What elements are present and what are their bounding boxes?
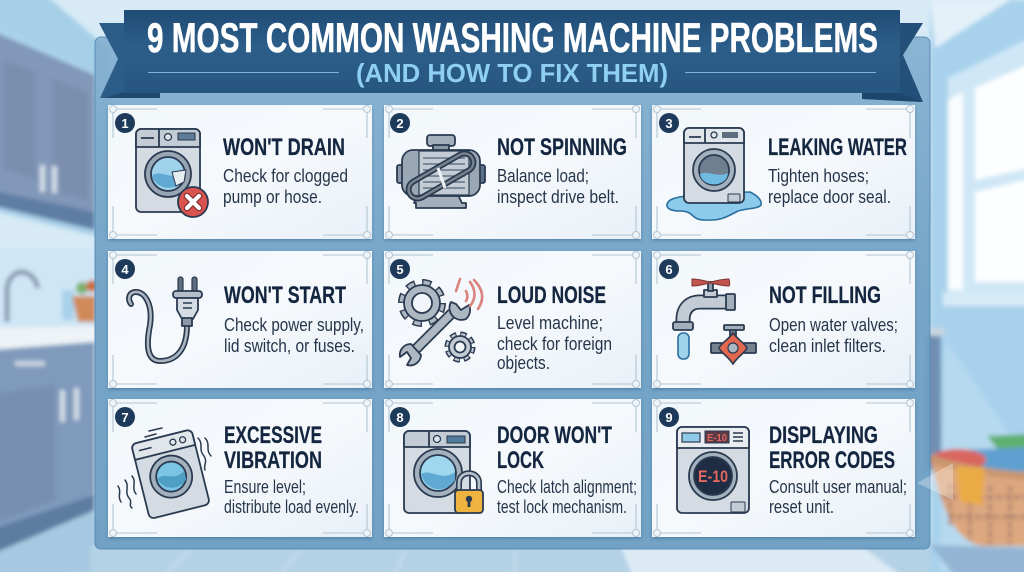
badge 2: 2 xyxy=(396,116,404,131)
badge 6: 6 xyxy=(665,262,673,277)
heading: EXCESSIVE xyxy=(224,422,322,449)
badge 3: 3 xyxy=(665,116,673,131)
panel: card 6 not filling xyxy=(652,251,915,388)
badge 9 xyxy=(659,407,679,427)
description: test lock mechanism. xyxy=(497,497,627,517)
description: inspect drive belt. xyxy=(497,187,619,207)
icon: motor with belt xyxy=(397,135,485,208)
badge 9: 9 xyxy=(665,410,673,425)
icon: washer showing E-10: E-10 xyxy=(698,467,728,486)
description: replace door seal. xyxy=(768,187,891,207)
panel: card 8 door won't lock xyxy=(384,399,641,537)
badge 1 xyxy=(115,113,135,133)
panel: card 2 not spinning xyxy=(384,105,641,239)
badge 1: 1 xyxy=(121,116,129,131)
description: distribute load evenly. xyxy=(224,497,359,517)
heading: LEAKING WATER xyxy=(768,134,907,161)
panel: card 5 loud noise xyxy=(384,251,641,388)
description: Check latch alignment; xyxy=(497,477,637,497)
icon: tap and valve xyxy=(673,279,756,364)
badge 4: 4 xyxy=(121,262,129,277)
icon: washer with red x xyxy=(136,129,208,217)
heading: ERROR CODES xyxy=(769,447,895,474)
icon: washer with padlock xyxy=(404,431,483,513)
description: Level machine; xyxy=(497,313,603,333)
badge 5: 5 xyxy=(396,262,404,277)
icon: washer showing E-10 xyxy=(677,427,749,513)
icon: gears, wrench and noise arcs xyxy=(400,279,482,365)
description: clean inlet filters. xyxy=(769,336,886,356)
badge 7 xyxy=(115,407,135,427)
icon: power plug and cord xyxy=(129,277,202,361)
heading: LOCK xyxy=(497,447,544,474)
panel: card 3 leaking water xyxy=(652,105,915,239)
icon: washer with puddle xyxy=(667,128,761,220)
description: lid switch, or fuses. xyxy=(224,336,355,356)
banner: title ribbon xyxy=(99,10,923,102)
badge 7: 7 xyxy=(121,410,129,425)
description: Check for clogged xyxy=(223,166,348,186)
description: objects. xyxy=(497,353,550,373)
icon: washer showing E-10: E-10 xyxy=(707,433,727,444)
heading: NOT SPINNING xyxy=(497,134,627,161)
heading: VIBRATION xyxy=(224,447,322,474)
description: Balance load; xyxy=(497,166,589,186)
heading: WON'T DRAIN xyxy=(223,134,345,161)
heading: NOT FILLING xyxy=(769,282,881,309)
panel: card 9 displaying error codes xyxy=(652,399,915,537)
description: Ensure level; xyxy=(224,477,306,497)
description: check for foreign xyxy=(497,334,612,354)
description: Consult user manual; xyxy=(769,477,907,497)
icon: shaking washer xyxy=(118,428,211,519)
panel: card 7 excessive vibration xyxy=(108,399,372,537)
heading: DISPLAYING xyxy=(769,422,878,449)
panel: translucent backing board xyxy=(95,37,930,549)
heading: WON'T START xyxy=(224,282,346,309)
badge 8 xyxy=(390,407,410,427)
badge 8: 8 xyxy=(396,410,404,425)
description: reset unit. xyxy=(769,497,834,517)
heading: LOUD NOISE xyxy=(497,282,606,309)
badge 2 xyxy=(390,113,410,133)
panel: card 4 won't start xyxy=(108,251,372,388)
badge 5 xyxy=(390,259,410,279)
subtitle: (AND HOW TO FIX THEM) xyxy=(356,58,668,88)
panel: card 1 won't drain xyxy=(108,105,372,239)
description: Check power supply, xyxy=(224,315,364,335)
description: Open water valves; xyxy=(769,315,898,335)
badge 3 xyxy=(659,113,679,133)
description: Tighten hoses; xyxy=(768,166,869,186)
heading: DOOR WON'T xyxy=(497,422,612,449)
description: pump or hose. xyxy=(223,187,322,207)
badge 4 xyxy=(115,259,135,279)
badge 6 xyxy=(659,259,679,279)
